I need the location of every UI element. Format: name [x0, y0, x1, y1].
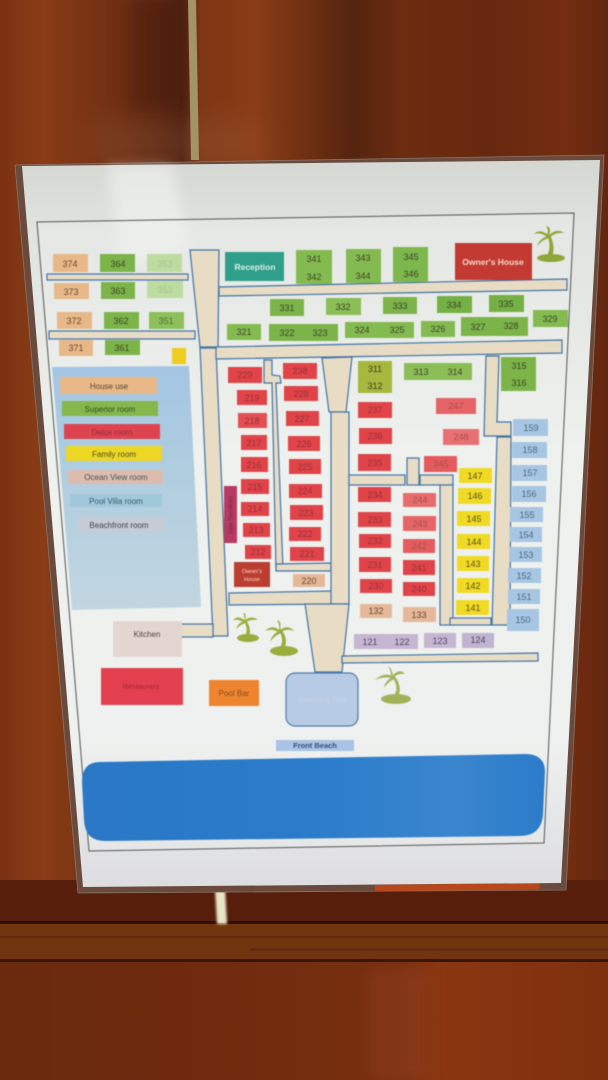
ocean view rooms — [293, 574, 436, 622]
family rooms: 141 — [465, 603, 481, 613]
restaurant: Restaurant — [123, 682, 160, 691]
deluxe rooms: 222 — [297, 529, 313, 539]
superior rooms: 313 — [413, 367, 429, 377]
house use rooms, far left: 372 — [66, 316, 82, 326]
deluxe rooms: 216 — [246, 460, 262, 470]
superior rooms: 328 — [503, 321, 519, 331]
pool villa rooms — [507, 419, 548, 631]
deluxe rooms: 223 — [298, 508, 314, 518]
pool villa rooms: 153 — [518, 550, 534, 560]
legend: ocean view room: Ocean View room — [84, 473, 148, 482]
legend: house use — [60, 377, 157, 394]
deluxe rooms: 237 — [367, 405, 383, 415]
icon: palm island centre — [265, 620, 298, 656]
pool villa rooms: 159 — [523, 423, 539, 433]
reception — [225, 252, 284, 281]
beachfront rooms: 121 — [362, 637, 378, 647]
pool — [286, 673, 358, 726]
door latch glint — [215, 888, 227, 924]
superior rooms: 322 — [279, 328, 295, 338]
orange reflection on sleeve edge — [375, 883, 540, 891]
superior rooms: 353 — [157, 259, 173, 269]
house use rooms, far left: 374 — [62, 259, 78, 269]
pool villa rooms: 156 — [521, 489, 537, 499]
pool villa rooms: 150 — [515, 615, 531, 625]
pool villa rooms: 155 — [519, 510, 535, 520]
deluxe rooms: 231 — [367, 560, 383, 570]
house use rooms, far left — [53, 254, 93, 356]
legend: family room: Family room — [92, 450, 136, 459]
superior rooms: 331 — [279, 303, 295, 313]
deluxe rooms: 234 — [367, 490, 383, 500]
deluxe rooms: 215 — [247, 482, 263, 492]
superior rooms: 361 — [114, 343, 130, 353]
kitchen: Kitchen — [134, 630, 160, 639]
door panel groove — [188, 0, 199, 160]
kitchen — [113, 621, 182, 657]
side building — [224, 486, 237, 543]
paler deluxe rooms: 243 — [412, 519, 428, 529]
deluxe rooms: 214 — [247, 504, 263, 514]
legend: pool villa room — [70, 494, 162, 507]
paler deluxe rooms: 247 — [448, 401, 464, 411]
legend panel — [52, 366, 201, 610]
deluxe rooms: 224 — [297, 486, 313, 496]
side building: Spa Services — [228, 495, 234, 534]
owner's house small — [234, 562, 270, 587]
pool villa rooms: 151 — [516, 592, 532, 602]
superior rooms: 311 — [368, 364, 382, 374]
house use rooms, far left: 373 — [63, 287, 79, 297]
deluxe rooms: 213 — [248, 525, 264, 535]
icon: palm island lower right — [375, 666, 411, 704]
deluxe rooms: 238 — [292, 366, 308, 376]
superior rooms: 323 — [312, 328, 328, 338]
superior rooms: 343 — [355, 253, 371, 263]
superior rooms: 363 — [110, 286, 126, 296]
family rooms: 146 — [467, 491, 483, 501]
superior rooms: 362 — [113, 316, 129, 326]
pool: Swimming Pool — [298, 697, 347, 704]
superior rooms: 316 — [511, 378, 527, 388]
map frame — [37, 213, 574, 851]
ocean view rooms: 133 — [411, 610, 427, 620]
deluxe rooms: 217 — [246, 438, 262, 448]
legend: delux room — [64, 424, 160, 439]
deluxe rooms: 229 — [237, 370, 253, 380]
beachfront rooms: 124 — [470, 635, 486, 645]
family rooms — [456, 468, 492, 615]
pool villa rooms: 152 — [516, 571, 532, 581]
superior rooms: 324 — [354, 325, 370, 335]
family rooms: 144 — [466, 537, 482, 547]
owner's house small: House — [244, 577, 260, 583]
superior rooms: 326 — [430, 324, 446, 334]
legend: beachfront room: Beachfront room — [89, 521, 149, 530]
family rooms: 147 — [467, 471, 483, 481]
superior rooms: 335 — [498, 299, 514, 309]
front beach label: Front Beach — [293, 741, 337, 750]
pool bar — [209, 680, 259, 706]
deluxe rooms: 241 — [411, 563, 427, 573]
beachfront rooms — [354, 633, 494, 649]
house use rooms, far left: 371 — [68, 343, 84, 353]
icon: palm island left — [233, 613, 259, 642]
deluxe rooms: 232 — [367, 536, 383, 546]
superior rooms: 345 — [403, 252, 419, 262]
deluxe rooms: 228 — [293, 389, 309, 399]
legend: house use: House use — [90, 382, 129, 391]
owner's house small: Owner's — [242, 569, 262, 575]
ocean view rooms: 220 — [301, 576, 317, 586]
family rooms: 142 — [465, 581, 481, 591]
pool villa rooms: 158 — [522, 445, 538, 455]
deluxe rooms — [228, 363, 435, 596]
beachfront rooms: 122 — [394, 637, 410, 647]
reception: Reception — [234, 262, 276, 272]
laminated sleeve — [15, 155, 604, 893]
paler deluxe rooms: 244 — [412, 495, 428, 505]
owner's house large: Owner's House — [462, 257, 524, 267]
deluxe rooms: 219 — [244, 393, 260, 403]
superior rooms: 314 — [447, 367, 463, 377]
superior rooms: 332 — [335, 302, 351, 312]
superior rooms — [100, 247, 568, 393]
superior rooms: 327 — [470, 322, 486, 332]
glare on the sheet — [108, 165, 190, 262]
legend: family room — [66, 446, 162, 461]
deluxe rooms: 236 — [367, 431, 383, 441]
superior rooms: 351 — [158, 316, 174, 326]
paler deluxe rooms — [403, 398, 479, 553]
pool villa rooms: 157 — [522, 468, 538, 478]
superior rooms: 352 — [157, 285, 173, 295]
deluxe rooms: 230 — [368, 581, 384, 591]
family rooms: 143 — [465, 559, 481, 569]
superior rooms: 346 — [403, 269, 419, 279]
icon: palm island top right — [534, 226, 565, 262]
superior rooms: 334 — [446, 300, 462, 310]
superior rooms: 344 — [355, 271, 371, 281]
owner's house large — [455, 243, 532, 280]
deluxe rooms: 235 — [367, 458, 383, 468]
superior rooms: 321 — [236, 327, 252, 337]
roads and walkways — [47, 250, 567, 672]
ocean view rooms: 132 — [368, 606, 384, 616]
legend: delux room: Delux room — [92, 428, 133, 437]
deluxe rooms: 218 — [244, 416, 260, 426]
paler deluxe rooms: 245 — [433, 459, 449, 469]
beachfront rooms: 123 — [432, 636, 448, 646]
paper sheet — [22, 160, 600, 887]
legend: ocean view room — [68, 470, 163, 484]
deluxe rooms: 225 — [297, 462, 313, 472]
superior rooms: 315 — [511, 361, 527, 371]
legend: pool villa room: Pool Villa room — [89, 497, 143, 506]
superior rooms: 325 — [389, 325, 405, 335]
deluxe rooms: 240 — [411, 584, 427, 594]
legend: superior room — [62, 401, 158, 416]
front beach label — [276, 740, 354, 751]
deluxe rooms: 226 — [296, 439, 312, 449]
superior rooms: 364 — [110, 259, 126, 269]
deluxe rooms: 227 — [294, 414, 310, 424]
superior rooms: 342 — [306, 272, 322, 282]
yellow marker — [172, 348, 186, 364]
pool bar: Pool Bar — [219, 689, 250, 698]
resort map — [37, 213, 574, 851]
superior rooms: 333 — [392, 301, 408, 311]
restaurant — [101, 668, 183, 705]
legend: superior room: Superior room — [85, 405, 136, 414]
deluxe rooms: 233 — [367, 515, 383, 525]
deluxe rooms: 212 — [250, 547, 266, 557]
paler deluxe rooms: 242 — [411, 541, 427, 551]
family rooms: 145 — [466, 514, 482, 524]
legend: beachfront room — [78, 517, 165, 532]
sea — [82, 754, 545, 841]
deluxe rooms: 221 — [299, 549, 315, 559]
superior rooms: 341 — [306, 254, 322, 264]
superior rooms: 329 — [542, 314, 558, 324]
paler deluxe rooms: 248 — [453, 432, 469, 442]
pool villa rooms: 154 — [518, 530, 534, 540]
superior rooms: 312 — [367, 381, 383, 391]
